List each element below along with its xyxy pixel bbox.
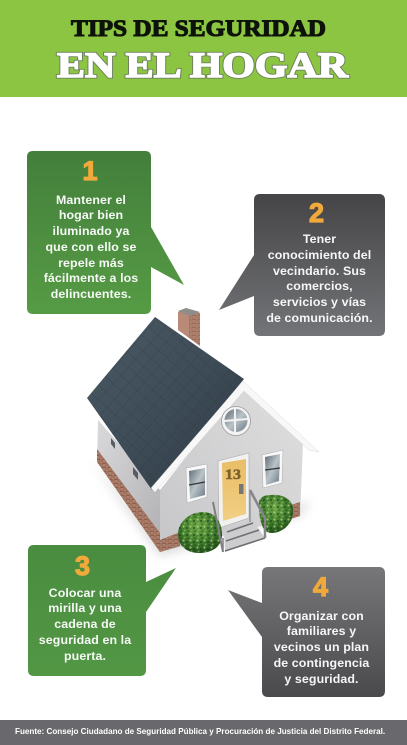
side wall <box>97 420 160 552</box>
tip 3 text: mirilla y una <box>48 601 122 615</box>
tip 4 text: y seguridad. <box>284 672 359 686</box>
right window <box>262 450 283 488</box>
tip 4 text: de contingencia <box>274 656 369 670</box>
tip 3 text: Colocar una <box>49 586 121 600</box>
house illustration <box>87 308 319 556</box>
tip 4 text: familiares y <box>287 624 356 638</box>
tip 1 text: hogar bien <box>59 208 123 222</box>
round window <box>222 406 250 436</box>
tip 1 text: delincuentes. <box>51 287 131 301</box>
tip 2 text <box>266 232 373 325</box>
title line 1: TIPS DE SEGURIDAD <box>71 16 326 42</box>
tip 3 number: 3 <box>75 551 90 581</box>
chimney <box>178 308 200 346</box>
header band <box>0 0 407 97</box>
tip 2 text: de comunicación. <box>266 311 373 325</box>
tip 2 number: 2 <box>309 198 324 228</box>
tip 4 text: Organizar con <box>279 608 364 622</box>
tip 3 text: seguridad en la <box>39 633 131 647</box>
tip 4 text <box>274 608 370 686</box>
footer source <box>0 720 407 745</box>
tip 1 text: Mantener el <box>56 192 126 206</box>
right bush <box>259 495 293 533</box>
tip 3 text: cadena de <box>54 617 116 631</box>
bubble 1 <box>27 151 184 314</box>
door <box>218 453 249 528</box>
title line 2 outline: EN EL HOGAR <box>57 45 349 85</box>
bubble 3 <box>28 545 176 676</box>
door number: 13 <box>225 467 241 483</box>
tip 1 text: que con ello se <box>45 240 136 254</box>
title <box>56 16 350 85</box>
tip 2 text: vecindario. Sus <box>273 264 366 278</box>
tip 2 text: conocimiento del <box>268 248 371 262</box>
roof trim <box>151 381 319 492</box>
bubble 4 <box>228 567 385 697</box>
tip 2 text: comercios, <box>286 279 353 293</box>
title line 2: EN EL HOGAR <box>57 45 349 85</box>
side brick base <box>97 449 160 552</box>
tip 4 number: 4 <box>313 572 328 602</box>
front brick base right <box>288 502 300 520</box>
tip 4 text: vecinos un plan <box>274 640 369 654</box>
footer source: Fuente: Consejo Ciudadano de Seguridad Pública y Procuración de Justicia del Distrito Federal. <box>15 727 385 736</box>
bubble 2 <box>219 194 385 336</box>
tip 1 text: fácilmente a los <box>44 271 138 285</box>
left window <box>186 464 207 503</box>
tip 3 text <box>39 586 132 662</box>
ground shadow <box>92 462 312 556</box>
tip 1 text: repele más <box>58 256 124 270</box>
tip 3 text: puerta. <box>64 648 106 662</box>
tip 1 number: 1 <box>82 156 98 186</box>
tip 2 text: servicios y vías <box>273 295 366 309</box>
roof <box>87 317 244 490</box>
front brick base left <box>160 532 180 552</box>
steps <box>213 490 265 552</box>
tip 1 text: iluminado ya <box>53 224 129 238</box>
left bush <box>178 512 222 553</box>
side windows <box>111 438 138 480</box>
tip 1 text <box>44 192 138 301</box>
tip 2 text: Tener <box>303 232 336 246</box>
front wall <box>160 385 303 552</box>
